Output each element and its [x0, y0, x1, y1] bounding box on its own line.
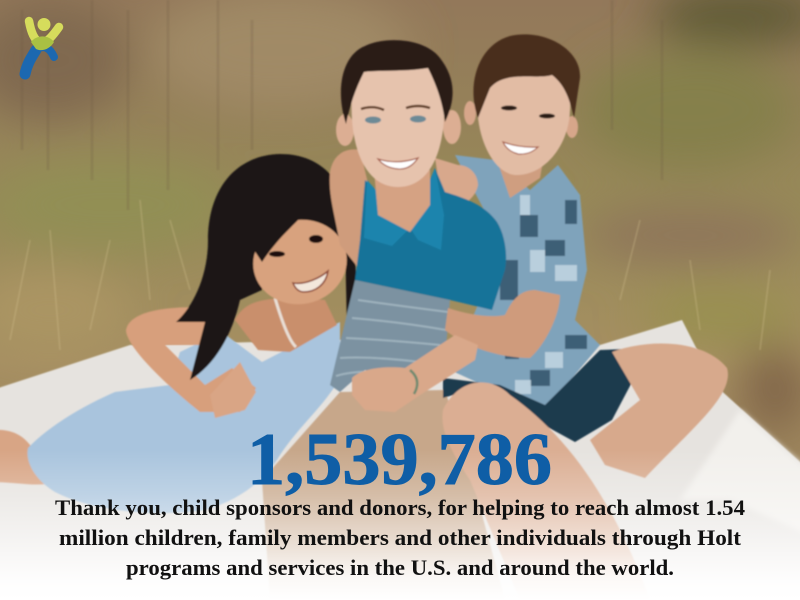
centre boy's forearm and fist [352, 335, 478, 412]
child: girl on the left [0, 154, 362, 513]
right boy's ears [464, 101, 578, 138]
front thigh [442, 382, 650, 600]
girl's eyes [269, 235, 323, 257]
logo: Holt figure [25, 18, 59, 74]
blanket [0, 320, 800, 600]
right boy's smile [503, 142, 538, 154]
right boy's hair [473, 34, 580, 118]
white fade over the bottom of the photo [0, 450, 800, 600]
smile [378, 158, 418, 169]
girl's leg [0, 430, 47, 485]
eyes [365, 116, 426, 124]
right boy's arm [445, 290, 560, 358]
logo arms [29, 21, 59, 44]
line 1: Thank you, child sponsors and donors, for helping to reach almost 1.54 [55, 495, 745, 520]
girl's necklace [275, 298, 296, 347]
forearm behind neck and hand [435, 158, 478, 205]
right boy's navy shorts [443, 348, 650, 442]
grey striped shirt [330, 280, 450, 392]
hair [341, 40, 453, 124]
teal polo shirt [355, 168, 506, 310]
line 3: programs and services in the U.S. and around the world. [126, 555, 674, 580]
eyebrows [361, 106, 430, 110]
girl's dress [27, 322, 340, 513]
raised knee leg [590, 344, 728, 478]
thank-you message [55, 495, 745, 580]
child: boy on the right [450, 34, 600, 410]
lower bodies and legs [210, 290, 728, 600]
girl's hair [176, 154, 362, 380]
big number: 1,539,786 [247, 419, 552, 501]
girl's hand [210, 362, 256, 418]
girl's shoulder and chest [235, 298, 337, 352]
logo torso [31, 36, 54, 50]
stripes [336, 300, 448, 376]
line 2: million children, family members and other individuals through Holt [59, 525, 742, 550]
blanket folds on the right [680, 410, 800, 540]
bracelet [410, 370, 417, 394]
plaid pattern [500, 200, 587, 386]
polo collar [364, 168, 444, 250]
right boy's plaid shirt [450, 155, 600, 410]
girl's bangs [254, 197, 350, 262]
logo head [38, 18, 50, 31]
right boy's neck [497, 150, 545, 198]
logo right leg [36, 47, 54, 57]
ears [336, 110, 461, 146]
logo legs [25, 50, 36, 74]
neck [374, 170, 430, 232]
centre boy's shorts [262, 390, 505, 600]
right boy's face [477, 66, 570, 175]
right boy's eyes [501, 106, 555, 118]
girl's smile [293, 271, 328, 292]
girl's arm [126, 307, 256, 412]
face [352, 62, 444, 187]
child: boy in the centre [330, 40, 506, 392]
girl's face [245, 211, 355, 313]
raised arm [330, 149, 372, 270]
